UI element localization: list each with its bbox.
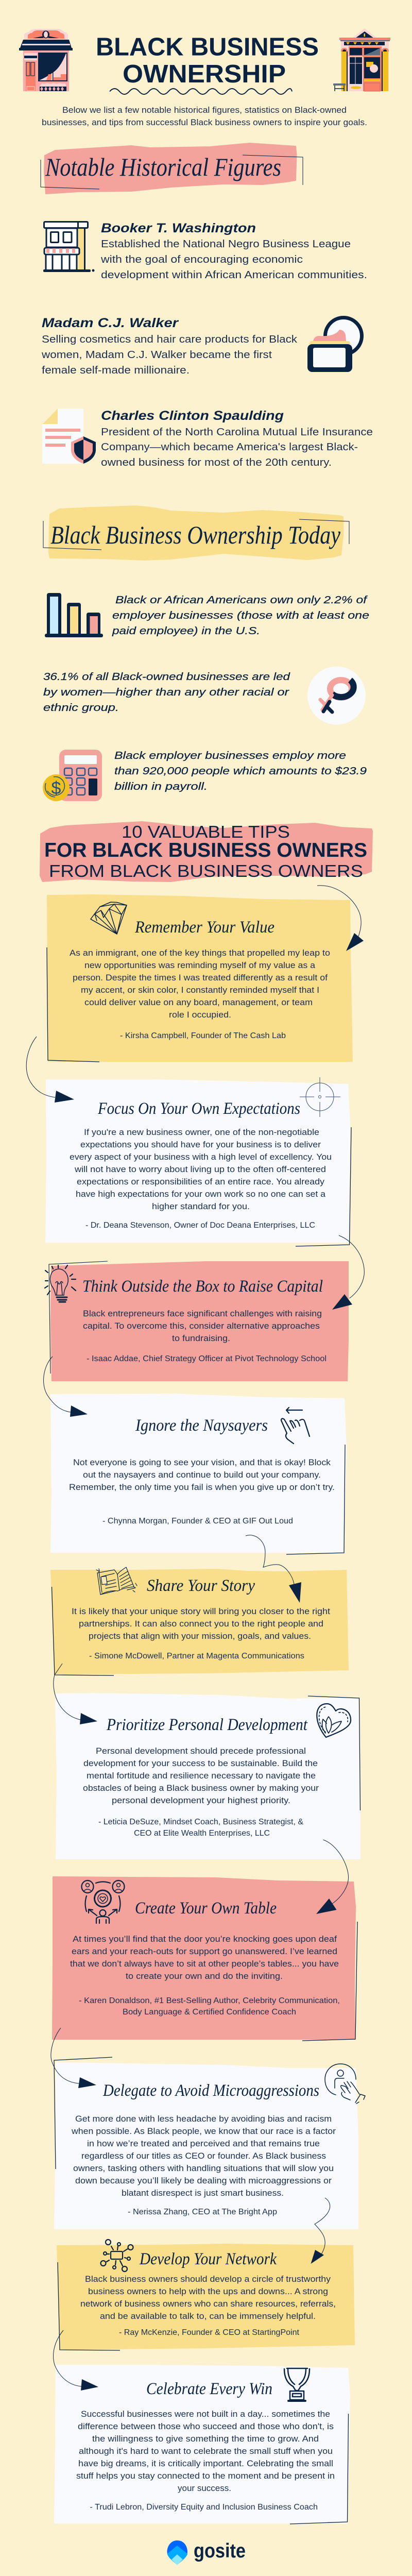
panel: tip 8 delegate to avoid microaggressions bbox=[54, 2057, 365, 2229]
description: Established the National Negro Business League bbox=[101, 239, 351, 250]
quote text: projects that align with your mission, goals, and values. bbox=[89, 1632, 311, 1641]
arrow: into tip 8 bbox=[51, 2028, 96, 2088]
attribution: - Simone McDowell, Partner at Magenta Communications bbox=[89, 1652, 304, 1660]
quote text: to fundraising. bbox=[172, 1334, 230, 1343]
description: women, Madam C.J. Walker became the first bbox=[41, 349, 272, 361]
description bbox=[41, 334, 298, 376]
title bbox=[96, 33, 319, 88]
description bbox=[101, 427, 373, 468]
attribution: - Leticia DeSuze, Mindset Coach, Business Strategist, & bbox=[98, 1818, 304, 1826]
section heading: 10 valuable tips bbox=[40, 821, 373, 882]
wordmark: gosite bbox=[194, 2540, 246, 2562]
name: Booker T. Washington bbox=[101, 221, 256, 235]
heading: Celebrate Every Win bbox=[146, 2380, 272, 2398]
stat text bbox=[43, 671, 290, 714]
quote text bbox=[71, 2114, 336, 2198]
panel: tip 2 focus on your own expectations bbox=[45, 1077, 351, 1246]
figure: Madam C.J. Walker bbox=[41, 316, 362, 376]
stat text bbox=[114, 750, 367, 792]
quote text: when possible. As Black people, we know that our race is a factor bbox=[71, 2127, 336, 2136]
panel: tip 9 develop your network bbox=[57, 2240, 355, 2350]
section heading: notable historical figures: Notable Historical Figures bbox=[45, 152, 281, 181]
quote text: blatant disrespect is just smart business. bbox=[122, 2189, 284, 2198]
quote text bbox=[70, 1935, 339, 1981]
stat text: paid employee) in the U.S. bbox=[112, 625, 260, 637]
arrow: into tip 3 bbox=[332, 1235, 364, 1310]
title: OWNERSHIP bbox=[123, 60, 286, 88]
panel: tip 3 think outside the box bbox=[45, 1261, 349, 1381]
icon: hand selecting person bbox=[325, 2064, 365, 2104]
heading: Delegate to Avoid Microaggressions bbox=[102, 2081, 319, 2100]
card background bbox=[50, 1394, 347, 1553]
quote text: have big dreams, it is critically important. Celebrating the small bbox=[78, 2459, 333, 2468]
stat text: than 920,000 people which amounts to $23.9 bbox=[114, 766, 367, 777]
stat text bbox=[112, 595, 369, 637]
description: President of the North Carolina Mutual Life Insurance bbox=[101, 427, 373, 438]
icon: trophy bbox=[284, 2368, 310, 2401]
quote text: although it's hard to want to celebrate the small stuff when you bbox=[79, 2447, 333, 2456]
description bbox=[100, 239, 367, 281]
icon: target bbox=[300, 1077, 340, 1117]
quote text: every aspect of your business with a high level of excellency. You bbox=[70, 1153, 332, 1162]
quote text: Black business owners should develop a circle of trustworthy bbox=[85, 2275, 331, 2284]
quote text: difference between those who succeed and those who don't, is bbox=[78, 2422, 334, 2431]
icon: network nodes bbox=[101, 2240, 133, 2272]
card background bbox=[54, 2365, 350, 2523]
panel: tip 5 share your story bbox=[50, 1567, 349, 1675]
card background bbox=[54, 2062, 358, 2229]
icon: cosmetic jar and mirror bbox=[307, 317, 362, 372]
quote text: owners, tasking others with handling situations that will slow you bbox=[73, 2164, 334, 2173]
quote text: At times you’ll find that the door you’re knocking goes upon deaf bbox=[73, 1935, 337, 1944]
figure: Charles Clinton Spaulding bbox=[42, 409, 373, 468]
stat: 2.2% of employer businesses bbox=[45, 593, 369, 637]
card background bbox=[57, 2244, 355, 2350]
figure: Booker T. Washington bbox=[43, 221, 367, 281]
attribution: - Dr. Deana Stevenson, Owner of Doc Deana Enterprises, LLC bbox=[85, 1221, 315, 1230]
arrow: into tip 4 bbox=[44, 1357, 88, 1417]
quote text: personal development your highest priority. bbox=[112, 1796, 290, 1805]
quote text: and be available to talk to, can be immensely helpful. bbox=[100, 2312, 316, 2321]
icon: calculator and coin: $ bbox=[52, 778, 61, 798]
attribution: - Nerissa Zhang, CEO at The Bright App bbox=[128, 2208, 277, 2216]
description: female self-made millionaire. bbox=[42, 365, 190, 376]
arrow: into tip 10 bbox=[54, 2330, 98, 2391]
name: Charles Clinton Spaulding bbox=[101, 409, 284, 423]
card background bbox=[45, 1079, 350, 1243]
quote text: Not everyone is going to see your vision, and that is okay! Block bbox=[73, 1458, 331, 1467]
intro text bbox=[42, 105, 367, 127]
stat text: by women—higher than any other racial or bbox=[43, 687, 290, 698]
quote text: obstacles of being a Black business owner by making your bbox=[83, 1784, 319, 1793]
card background bbox=[50, 1569, 349, 1674]
quote text: down because you’ll likely be dealing with microaggressions or bbox=[75, 2176, 332, 2185]
heading: Prioritize Personal Development bbox=[106, 1716, 308, 1734]
arrow: into tip 1 bbox=[317, 886, 364, 951]
quote text: Get more done with less headache by avoiding bias and racism bbox=[75, 2114, 332, 2124]
arrow: into tip 5 bbox=[246, 1535, 301, 1603]
quote text bbox=[80, 2275, 336, 2321]
quote text bbox=[70, 1128, 332, 1211]
arrow: into tip 6 bbox=[54, 1664, 97, 1724]
stat: 920,000 employees bbox=[43, 750, 367, 801]
description: with the goal of encouraging economic bbox=[100, 254, 303, 265]
icon: female symbol bbox=[307, 667, 366, 724]
stat text: ethnic group. bbox=[43, 702, 119, 714]
logo: gosite bbox=[167, 2540, 246, 2565]
attribution: - Karen Donaldson, #1 Best-Selling Author, Celebrity Communication, bbox=[79, 1996, 340, 2005]
quote text: partnerships. It can also connect you to the right people and bbox=[79, 1619, 323, 1629]
quote text: It is likely that your unique story will bring you closer to the right bbox=[72, 1607, 330, 1616]
icon: hand pointing with arrow bbox=[281, 1408, 310, 1444]
icon: storefront building bbox=[43, 222, 95, 272]
description: Company—which became America's largest Black- bbox=[101, 442, 358, 453]
quote text: network of business owners who can share resources, referrals, bbox=[80, 2299, 336, 2309]
quote text bbox=[83, 1747, 319, 1805]
quote text: development for your success to be sustainable. Build the bbox=[83, 1759, 318, 1768]
quote text: stuff helps you stay connected to the moment and be present in bbox=[76, 2471, 335, 2481]
intro text: Below we list a few notable historical figures, statistics on Black-owned bbox=[62, 105, 347, 115]
quote text bbox=[70, 948, 330, 1020]
quote text: expectations or responsibilities of an entire race. You already bbox=[77, 1177, 325, 1187]
quote text: the willingness to give something the time to grow. And bbox=[92, 2434, 319, 2444]
quote text: your success. bbox=[178, 2484, 231, 2493]
icon: left storefront bbox=[19, 29, 73, 91]
icon: map pin bbox=[167, 2540, 187, 2565]
section heading: 10 valuable tips: FROM BLACK BUSINESS OWNERS bbox=[49, 861, 363, 880]
quote text: have high expectations for your own work so no one can set a bbox=[76, 1190, 326, 1199]
attribution: - Trudi Lebron, Diversity Equity and Inclusion Business Coach bbox=[90, 2503, 318, 2512]
panel: tip 7 create your own table bbox=[52, 1876, 357, 2041]
quote text bbox=[72, 1607, 330, 1641]
icon: insurance document with shield bbox=[42, 409, 96, 464]
icon: right storefront bbox=[333, 28, 390, 91]
arrow: into tip 9 bbox=[311, 2198, 330, 2264]
quote text: As an immigrant, one of the key things that propelled my leap to bbox=[70, 948, 330, 958]
heading: Create Your Own Table bbox=[135, 1899, 277, 1918]
attribution: - Kirsha Campbell, Founder of The Cash Lab bbox=[120, 1031, 286, 1040]
quote text bbox=[69, 1458, 335, 1492]
heading: Develop Your Network bbox=[139, 2250, 277, 2268]
title: BLACK BUSINESS bbox=[96, 33, 319, 61]
heading: Think Outside the Box to Raise Capital bbox=[82, 1277, 323, 1296]
quote text: Black entrepreneurs face significant challenges with raising bbox=[83, 1309, 322, 1318]
attribution: Body Language & Certified Confidence Coach bbox=[123, 2008, 296, 2016]
stat text: employer businesses (those with at least one bbox=[112, 610, 369, 621]
section heading: black business ownership today bbox=[43, 506, 349, 560]
attribution: CEO at Elite Wealth Enterprises, LLC bbox=[134, 1829, 270, 1838]
quote text: Remember, the only time you fail is when you give up or don’t try. bbox=[69, 1483, 335, 1492]
quote text: If you're a new business owner, one of the non-negotiable bbox=[84, 1128, 319, 1137]
card background bbox=[55, 1693, 360, 1859]
card background bbox=[50, 1261, 349, 1381]
section heading: black business ownership today: Black Business Ownership Today bbox=[50, 520, 341, 549]
quote text bbox=[76, 2410, 335, 2493]
arrow: into tip 7 bbox=[316, 1840, 349, 1914]
icon: heart and lotus bbox=[317, 1704, 351, 1737]
description: development within African American communities. bbox=[101, 269, 367, 281]
stat text: 36.1% of all Black-owned businesses are led bbox=[43, 671, 290, 683]
description: Selling cosmetics and hair care products for Black bbox=[42, 334, 298, 345]
stat text: Black employer businesses employ more bbox=[114, 750, 346, 761]
icon: open book bbox=[96, 1567, 137, 1595]
quote text: my accent, or skin color, I constantly reminded myself that I bbox=[81, 986, 319, 995]
title wave underline bbox=[110, 89, 292, 94]
stat text: billion in payroll. bbox=[114, 781, 208, 792]
icon: light bulb bbox=[45, 1265, 76, 1302]
quote text: expectations you should have for your business is to deliver bbox=[80, 1140, 321, 1149]
quote text: Personal development should precede professional bbox=[96, 1747, 306, 1756]
quote text: will not have to worry about living up to the often off-centered bbox=[74, 1165, 326, 1174]
icon: calculator and coin bbox=[43, 750, 102, 801]
section heading: 10 valuable tips: FOR BLACK BUSINESS OWNERS bbox=[44, 839, 367, 861]
section heading: 10 valuable tips: 10 VALUABLE TIPS bbox=[122, 822, 290, 841]
attribution: - Chynna Morgan, Founder & CEO at GIF Out Loud bbox=[102, 1517, 293, 1526]
icon: diamond bbox=[91, 902, 127, 934]
stat: 36.1% led by women bbox=[43, 667, 366, 724]
heading: Focus On Your Own Expectations bbox=[97, 1099, 300, 1118]
quote text: that we don’t always have to sit at other people’s tables... you have bbox=[70, 1959, 339, 1969]
arrow: into tip 2 bbox=[26, 1037, 74, 1103]
quote text: Successful businesses were not built in a day... sometimes the bbox=[81, 2410, 330, 2419]
quote text: could deliver value on any board, management, or team bbox=[84, 998, 313, 1007]
heading: Share Your Story bbox=[147, 1577, 255, 1595]
quote text: business owners to help with the ups and downs... A strong bbox=[88, 2287, 328, 2296]
icon: bar chart bbox=[45, 593, 103, 637]
icon: people around gear bbox=[81, 1880, 125, 1923]
panel: tip 1 remember your value bbox=[47, 894, 353, 1062]
attribution bbox=[98, 1818, 304, 1838]
heading: Remember Your Value bbox=[134, 918, 274, 937]
attribution bbox=[79, 1996, 340, 2016]
stat text: Black or African Americans own only 2.2% of bbox=[115, 595, 368, 606]
panel: tip 6 prioritize personal development bbox=[55, 1693, 360, 1859]
quote text: role I occupied. bbox=[169, 1010, 231, 1020]
panel: tip 4 ignore the naysayers bbox=[50, 1394, 347, 1554]
section heading: notable historical figures bbox=[41, 143, 303, 194]
quote text: to create your own and do the inviting. bbox=[126, 1972, 283, 1981]
intro text: businesses, and tips from successful Black business owners to inspire your goals. bbox=[42, 117, 367, 127]
quote text: higher standard for you. bbox=[152, 1202, 250, 1211]
panel: tip 10 celebrate every win bbox=[54, 2365, 350, 2524]
quote text: capital. To overcome this, consider alternative approaches bbox=[83, 1321, 320, 1331]
quote text: mental fortitude and resilience necessary to navigate the bbox=[87, 1771, 316, 1781]
quote text: out the naysayers and continue to build out your company. bbox=[83, 1470, 321, 1480]
quote text: person. Despite the times I was treated differently as a result of bbox=[73, 973, 328, 982]
card background bbox=[47, 894, 353, 1062]
description: owned business for most of the 20th century. bbox=[101, 457, 332, 468]
attribution: - Isaac Addae, Chief Strategy Officer at Pivot Technology School bbox=[87, 1354, 327, 1363]
card background bbox=[52, 1876, 356, 2040]
quote text: new opportunities was reminding myself of my value as a bbox=[84, 961, 316, 970]
quote text bbox=[83, 1309, 322, 1343]
quote text: ears and your reach-outs for support go unanswered. I’ve learned bbox=[72, 1947, 337, 1956]
heading: Ignore the Naysayers bbox=[135, 1416, 268, 1435]
quote text: in how we’re treated and perceived and that remains true bbox=[87, 2139, 320, 2148]
quote text: regardless of our titles as CEO or founder. As Black business bbox=[81, 2151, 326, 2161]
name: Madam C.J. Walker bbox=[42, 316, 179, 330]
attribution: - Ray McKenzie, Founder & CEO at StartingPoint bbox=[119, 2328, 300, 2337]
